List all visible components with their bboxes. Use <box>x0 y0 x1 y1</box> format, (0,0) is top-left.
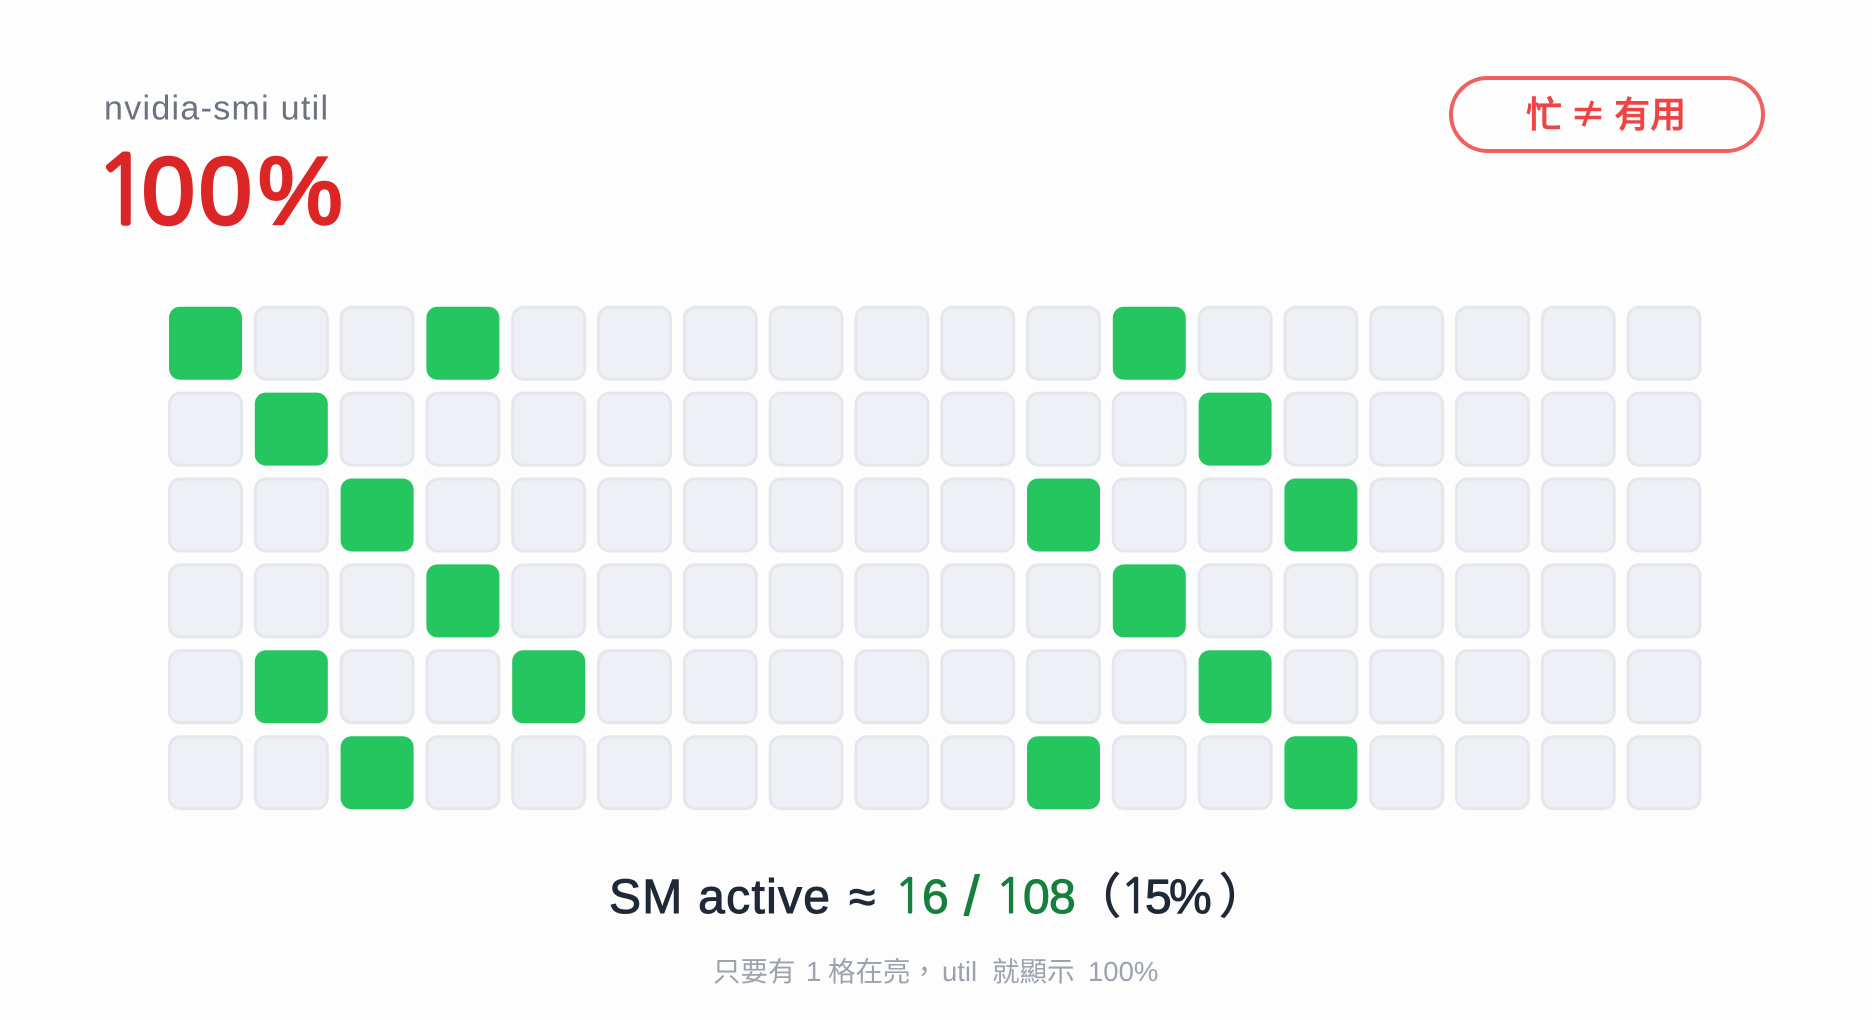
caption: 100% <box>1088 956 1158 987</box>
summary: SM active ratio: 5% <box>1145 871 1212 924</box>
caption: 1 <box>806 956 821 987</box>
summary: SM active ratio: 08 <box>1023 871 1076 924</box>
row 6 <box>170 736 1700 809</box>
summary: SM active ratio: / <box>964 864 980 927</box>
row 3 <box>170 478 1700 552</box>
badge: busy is not useful: 忙 ≠ 有用 <box>1526 86 1686 138</box>
summary: SM active ratio <box>609 864 1267 927</box>
caption: util <box>942 956 977 987</box>
summary: SM active ratio: ≈ <box>849 871 875 924</box>
summary: SM active ratio: （ <box>1073 871 1121 924</box>
caption: 格在亮， <box>828 956 938 987</box>
caption: 只要有 <box>713 956 796 987</box>
summary: SM active ratio: 1 <box>995 872 1024 920</box>
grid: 108 SM cells, 16 active <box>169 307 1700 809</box>
summary: SM active ratio: 1 <box>1120 872 1149 920</box>
label: nvidia-smi util: nvidia-smi util <box>104 90 328 128</box>
row 2 <box>170 393 1700 466</box>
summary: SM active ratio: 6 <box>922 871 949 924</box>
summary: SM active ratio: 1 <box>894 872 923 920</box>
row 1 <box>169 307 1700 380</box>
badge: busy is not useful <box>1451 78 1763 151</box>
caption: 就顯示 <box>992 956 1074 987</box>
summary: SM active ratio: SM active <box>609 871 830 924</box>
row 5 <box>170 650 1700 723</box>
big number: 100%: 00% <box>142 138 342 244</box>
summary: SM active ratio: ） <box>1219 871 1267 924</box>
row 4 <box>170 564 1700 637</box>
big number: 100%: 1 <box>94 142 152 238</box>
